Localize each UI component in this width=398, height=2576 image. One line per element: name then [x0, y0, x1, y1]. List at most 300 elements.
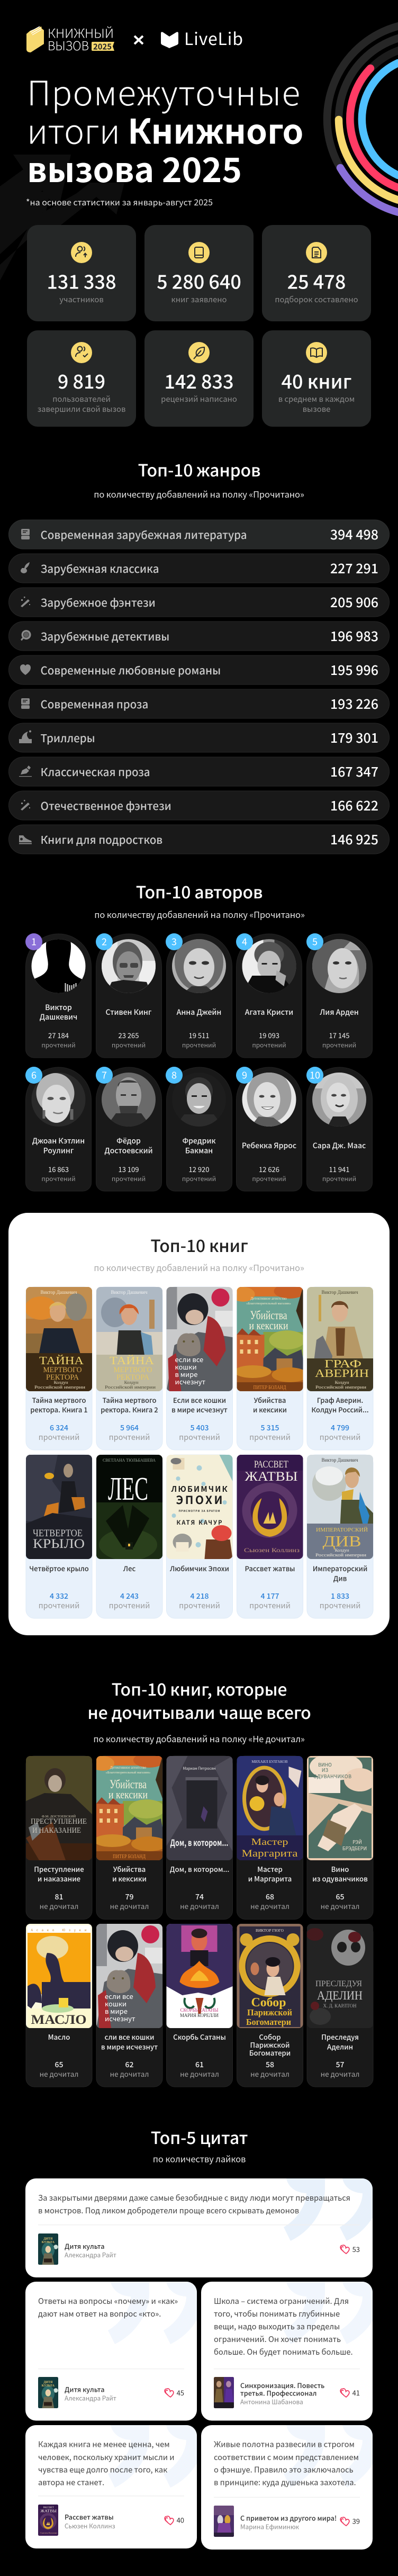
book card 7: Лес — [123, 1563, 135, 1573]
panel: quote 2: Ответы на вопросы «почему» и «как» — [38, 2295, 178, 2307]
cover: Императорский див: ИМПЕРАТОРСКИЙ — [316, 1527, 368, 1533]
cover: Тайна мертвого ректора 1: ТАЙНА — [39, 1354, 84, 1367]
row: genre 1 — [8, 520, 390, 549]
row: genre 1: 394 498 — [330, 525, 378, 544]
photo: Anna Jane — [172, 939, 226, 993]
panel: quote 1 — [25, 2178, 381, 2277]
cover: Граф Аверин: Российской империи — [315, 1384, 367, 1390]
author card 1: 27 184 — [48, 1030, 69, 1040]
cover: Четвёртое крыло — [26, 1455, 92, 1559]
book card 7 — [96, 1455, 162, 1618]
author card 3: 19 511 — [188, 1030, 210, 1040]
cover: Тайна мертвого ректора 2: Российской империи — [105, 1384, 156, 1390]
row: genre 5: 195 996 — [330, 660, 378, 679]
row: genre 10: Книги для подростков — [40, 831, 162, 847]
icon: users up — [71, 242, 92, 263]
row: genre 9 — [8, 791, 390, 820]
row: genre 9: 166 622 — [330, 796, 378, 815]
row: genre 3: Зарубежное фэнтези — [40, 594, 156, 610]
rank badge 8: 8 — [171, 1068, 177, 1082]
book card 2 — [96, 1287, 162, 1450]
panel: quote 2 — [25, 2282, 205, 2420]
cover: Четвёртое крыло: ЧЕТВЕРТОЕ — [33, 1528, 83, 1539]
row: genre 9: Отечественное фэнтези — [40, 797, 171, 813]
heading: top genres: Топ-10 жанров — [138, 457, 260, 482]
subheading: books: по количеству добавлений на полку «Прочитано» — [94, 1261, 304, 1274]
book card 6: прочтений — [39, 1600, 79, 1611]
cover: Любимчик эпохи: ЭПОХИ — [176, 1492, 222, 1508]
rank badge 6 — [25, 1067, 42, 1084]
row: genre 8: 167 347 — [330, 762, 378, 781]
circular progress rings — [327, 23, 398, 215]
book card 4: прочтений — [249, 1431, 291, 1443]
row: genre 6: Современная проза — [40, 696, 148, 711]
rank badge 10: 10 — [310, 1068, 320, 1082]
dnf card 6: Масло — [48, 2032, 70, 2042]
panel: quote 1: За закрытыми дверями даже самые безобидные с виду люди могут превращаться — [38, 2192, 350, 2203]
row: genre 4: 196 983 — [330, 626, 378, 645]
book card 9 — [237, 1455, 303, 1618]
row: genre 5 — [8, 655, 390, 684]
cover thumb: Дитя культа — [38, 2233, 58, 2265]
cover: Скорбь Сатаны — [166, 1924, 233, 2028]
cover thumb: Дитя культа — [38, 2377, 58, 2408]
dnf card 7: в мире исчезнут — [101, 2041, 158, 2052]
author card 2: Стивен Кинг — [106, 1007, 152, 1017]
photo: Agatha Christie — [242, 939, 296, 993]
book card 4: 5 315 — [260, 1422, 279, 1433]
dnf card 6: не дочитал — [40, 2068, 78, 2079]
book card 1: ректора. Книга 1 — [30, 1404, 88, 1415]
panel: quote 5: С приветом из другого мира! — [240, 2512, 337, 2523]
row: genre 7: Триллеры — [40, 729, 95, 745]
dnf card 3: не дочитал — [180, 1901, 219, 1911]
cover: Собор Парижской Богоматери — [237, 1924, 303, 2028]
row: genre 4 — [8, 622, 390, 651]
logo: Книжный вызов 2025: 2025 — [93, 40, 112, 52]
cover: Тайна мертвого ректора 2: РЕКТОРА — [116, 1373, 149, 1382]
dnf card 3 — [166, 1756, 233, 1920]
panel: quote 5: Марина Ефиминюк — [240, 2522, 300, 2532]
icon: hearts — [340, 2389, 349, 2397]
rank badge 5 — [306, 933, 323, 950]
footnote: *на основе статистики за январь-август 2025 — [26, 195, 213, 208]
author card 2: 23 265 — [119, 1030, 139, 1040]
icon: times sign — [134, 36, 143, 44]
panel: quote 4: 40 — [177, 2515, 184, 2525]
decor: quote marks — [284, 2425, 381, 2488]
cover: Если все кошки — [96, 1924, 162, 2028]
book card 1: Тайна мертвого — [32, 1395, 86, 1405]
book card 5: прочтений — [320, 1431, 360, 1443]
author card 10: прочтений — [322, 1174, 356, 1183]
title: итоги Книжного — [27, 105, 303, 154]
book card 2: Тайна мертвого — [103, 1395, 157, 1405]
dnf card 2: и кексики — [112, 1874, 147, 1884]
photo: Rowling — [32, 1073, 86, 1127]
logo: Книжный вызов 2025: ВЫЗОВ — [48, 36, 89, 54]
row: genre 10 — [8, 825, 390, 854]
dnf card 4: и Маргарита — [248, 1874, 292, 1884]
rank badge 4 — [236, 933, 253, 950]
author card 8: Бакман — [185, 1146, 213, 1156]
heading: top authors: Топ-10 авторов — [136, 879, 263, 904]
rank badge 10 — [306, 1067, 323, 1084]
book card 2: 5 964 — [120, 1422, 139, 1433]
panel: quote 4: Сьюзен Коллинз — [65, 2521, 115, 2530]
author card 9: прочтений — [252, 1174, 286, 1183]
author card 6 — [25, 1067, 91, 1191]
dnf card 2 — [91, 1753, 167, 1920]
book card 4: Убийства — [254, 1395, 286, 1405]
panel: stat participants: 131 338 — [47, 267, 116, 294]
book card 2: прочтений — [109, 1431, 150, 1443]
book card 8 — [166, 1455, 233, 1618]
panel: stat books: книг заявлено — [171, 294, 227, 305]
panel: quote 2: 45 — [177, 2388, 184, 2398]
panel: quote 1: Александра Райт — [65, 2250, 116, 2259]
panel: quote 3: Школа – система ограничений. Для — [214, 2295, 349, 2307]
cover: Граф Аверин: АВЕРИН — [315, 1367, 369, 1380]
cover: Собор Парижской Богоматери: Собор — [251, 1996, 286, 2010]
dnf card 10 — [306, 1924, 373, 2087]
panel: quote 1: в монстров. Под ликом добродетели проще всего скрывать демонов — [38, 2205, 299, 2216]
rank badge 2: 2 — [102, 935, 107, 949]
cover: Преследуя Аделин: Х. Д. КАРЛТОН — [323, 2003, 357, 2008]
panel: quote 4: автора не станет. — [38, 2476, 104, 2488]
title — [27, 67, 303, 192]
author card 7: Достоевский — [104, 1146, 153, 1156]
cover: Масло: МАСЛО — [31, 2013, 87, 2027]
panel: genre list — [8, 520, 390, 854]
dnf card 3: Дом, в котором... — [170, 1864, 229, 1874]
cover: Скорбь Сатаны: МАРИЯ КОРЕЛЛИ — [180, 2013, 219, 2018]
cover: Граф Аверин — [307, 1287, 373, 1391]
cover: Убийства и кексики — [237, 1287, 303, 1391]
author card 1: прочтений — [41, 1041, 76, 1049]
book card 9: 4 177 — [260, 1591, 279, 1601]
rank badge 9: 9 — [242, 1068, 247, 1082]
heading: top books: Топ-10 книг — [150, 1233, 248, 1257]
book card 3: Если все кошки — [173, 1395, 226, 1405]
cover: Дом, в котором: Дом, в котором... — [170, 1835, 229, 1849]
dnf card 7: сли все кошки — [105, 2032, 154, 2042]
subheading: unfinished: по количеству добавлений на полку «Не дочитал» — [93, 1732, 305, 1745]
row: genre 3: 205 906 — [330, 592, 378, 611]
row: genre 7: 179 301 — [330, 728, 378, 747]
cover: Четвёртое крыло: КРЫЛО — [33, 1537, 85, 1551]
dnf card 9: 58 — [266, 2059, 274, 2070]
cover: Тайна мертвого ректора 1: МЕРТВОГО — [43, 1366, 82, 1374]
dnf card 5: 65 — [336, 1892, 344, 1902]
dnf card 10: не дочитал — [321, 2068, 359, 2079]
decor: quote marks — [108, 2282, 205, 2344]
cover: Если все кошки — [166, 1287, 233, 1391]
dnf card 7: 62 — [125, 2059, 133, 2070]
book card 2: ректора. Книга 2 — [101, 1404, 158, 1415]
cover: Собор Парижской Богоматери: Богоматери — [246, 2017, 291, 2027]
book card 8: прочтений — [179, 1600, 220, 1611]
author card 3: Анна Джейн — [177, 1007, 221, 1017]
row: genre 1: Современная зарубежная литература — [40, 526, 247, 542]
cover: Скорбь Сатаны: СКОРБЬ САТАНЫ — [180, 2007, 219, 2013]
author card 7: Фёдор — [116, 1136, 141, 1146]
cover: Вино из одуванчиков — [307, 1753, 376, 1860]
cover: Преступление и наказание — [26, 1756, 92, 1860]
cover: Любимчик эпохи: КАТЯ КАЧУР — [177, 1518, 222, 1527]
panel: quote 2: Александра Райт — [65, 2394, 116, 2402]
dnf card 8: Скорбь Сатаны — [173, 2032, 226, 2042]
author card 8 — [166, 1067, 232, 1191]
cover: Тайна мертвого ректора 2: МЕРТВОГО — [113, 1366, 152, 1374]
book card 5: 4 799 — [331, 1422, 349, 1433]
subheading: quotes: по количеству лайков — [153, 2152, 246, 2165]
photo: Dostoevsky — [102, 1073, 156, 1127]
author card 1: Виктор — [45, 1002, 72, 1013]
panel: quote 3: вещи, надо выходить за пределы — [214, 2321, 340, 2332]
cover: Преследуя Аделин: ПРЕСЛЕДУЯ — [315, 1979, 362, 1988]
panel: stat average: вызове — [303, 403, 330, 415]
author card 8: прочтений — [182, 1174, 216, 1183]
dnf card 7: не дочитал — [110, 2068, 149, 2079]
panel: quote 1: 53 — [352, 2244, 360, 2254]
icon: document — [306, 242, 327, 263]
rank badge 8 — [166, 1067, 183, 1084]
rank badge 1: 1 — [31, 935, 37, 949]
cover: Масло: Асако Юзуки — [31, 1928, 87, 1932]
book card 7: 4 243 — [120, 1591, 139, 1601]
dnf card 2: Убийства — [113, 1864, 146, 1874]
row: genre 6: 193 226 — [330, 694, 378, 713]
cover: Мастер и Маргарита: Мастер — [251, 1836, 288, 1847]
photo: Backman — [181, 1077, 217, 1127]
panel: quote 3: третья. Профессионал — [240, 2388, 316, 2398]
decor: quote marks — [284, 2282, 381, 2344]
panel: quote 5: в принципе: куда душенька захотела. — [214, 2476, 356, 2488]
book card 10: Императорский — [313, 1563, 367, 1573]
cover: Вино из одуванчиков: ОДУВАНЧИКОВ — [313, 1773, 351, 1780]
dnf card 1 — [26, 1756, 92, 1920]
panel: quote 5: 39 — [352, 2516, 360, 2526]
row: genre 6 — [8, 689, 390, 718]
panel: quote 2: Дитя культа — [65, 2384, 105, 2394]
author card 6: Роулинг — [43, 1146, 74, 1156]
book card 8: 4 218 — [190, 1591, 209, 1601]
book card 4 — [237, 1286, 303, 1451]
panel: stat reviews: 142 833 — [164, 367, 234, 394]
panel: stat finishers: пользователей — [52, 393, 111, 404]
book card 3: 5 403 — [190, 1422, 209, 1433]
icon: hearts — [340, 2245, 349, 2254]
cover: Лес — [96, 1455, 162, 1561]
dnf card 8: не дочитал — [180, 2068, 219, 2079]
book card 10: прочтений — [320, 1600, 360, 1611]
panel: quote 1: Дитя культа — [65, 2241, 105, 2251]
book card 5: Колдун Россий... — [311, 1404, 369, 1415]
author card 7: прочтений — [112, 1174, 146, 1183]
cover: Граф Аверин: Виктор Дашкевич — [322, 1290, 358, 1295]
decor: quote marks — [284, 2178, 381, 2241]
panel: quote 3: 41 — [352, 2388, 360, 2398]
row: genre 8: Классическая проза — [40, 763, 150, 779]
rank badge 6: 6 — [31, 1068, 37, 1082]
cover: Тайна мертвого ректора 2: Колдун — [124, 1380, 139, 1385]
icon: feather — [188, 342, 210, 363]
panel: stat reviews — [144, 330, 254, 427]
rank badge 4: 4 — [242, 935, 247, 949]
author card 8: Фредрик — [182, 1136, 216, 1146]
author card 9: 12 626 — [259, 1164, 279, 1174]
author card 9 — [236, 1067, 302, 1191]
icon: open book — [306, 342, 327, 363]
logo: Книжный вызов 2025 — [26, 23, 114, 54]
panel: quote 4 — [25, 2425, 205, 2548]
panel: quote 3: Антонина Шабанова — [240, 2397, 303, 2407]
dnf card 1: не дочитал — [40, 1901, 78, 1911]
book card 7: прочтений — [109, 1600, 150, 1611]
cover: Преступление и наказание: ПРЕСТУПЛЕНИЕ — [31, 1817, 87, 1826]
author card 5: 17 145 — [329, 1030, 349, 1040]
dnf card 6: 65 — [55, 2059, 63, 2070]
cover: Преследуя Аделин: АДЕЛИН — [317, 1989, 363, 2002]
panel: quote 5: соответствии с моим представлением — [214, 2452, 359, 2463]
rank badge 3 — [166, 933, 183, 950]
book card 3 — [166, 1287, 233, 1450]
panel: stat finishers — [27, 330, 136, 427]
author card 9: Ребекка Яррос — [242, 1140, 296, 1151]
rank badge 9 — [236, 1067, 253, 1084]
rank badge 1 — [25, 933, 42, 950]
row: genre 8 — [8, 757, 390, 786]
cover: Тайна мертвого ректора 1: Колдун — [54, 1380, 68, 1385]
cover: Императорский див: Российской империи — [315, 1552, 367, 1557]
panel: quote 3: Синхронизация. Повесть — [240, 2380, 324, 2390]
cover thumb: С приветом из другого мира — [214, 2506, 234, 2537]
book card 3: в мире исчезнут — [171, 1404, 228, 1415]
book card 5: Граф Аверин. — [317, 1395, 363, 1405]
author card 7 — [96, 1067, 162, 1191]
dnf card 1: 81 — [55, 1892, 63, 1902]
dnf card 9: Собор — [259, 2032, 281, 2042]
icon: hearts — [165, 2516, 174, 2525]
dnf card 5: Вино — [331, 1864, 349, 1874]
book card 1 — [25, 1287, 92, 1450]
dnf card 2: не дочитал — [110, 1901, 149, 1911]
author card 6: 16 863 — [48, 1164, 69, 1174]
panel: quote 3: ограничений. Он хочет понимать — [214, 2334, 341, 2345]
cover: Мастер и Маргарита: Маргарита — [241, 1848, 298, 1859]
book card 6: 4 332 — [50, 1591, 68, 1601]
author card 4: прочтений — [252, 1041, 286, 1049]
author card 10: 11 941 — [329, 1164, 349, 1174]
dnf card 9: не дочитал — [250, 2068, 290, 2079]
panel: quote 4: человек, поскольку хранит мысли и — [38, 2452, 175, 2463]
cover: Рассвет жатвы — [237, 1455, 303, 1559]
icon: book — [188, 242, 210, 263]
dnf card 4: 68 — [266, 1892, 274, 1902]
dnf card 2: 79 — [125, 1892, 133, 1902]
row: genre 2 — [8, 554, 390, 583]
cover: Вино из одуванчиков: ВИНО — [318, 1761, 332, 1768]
dnf card 10: Аделин — [327, 2041, 353, 2052]
panel: stat average: 40 книг — [282, 367, 351, 394]
panel: quote 3 — [201, 2282, 381, 2420]
cover: Любимчик эпохи: ЛЮБИМЧИК — [170, 1483, 228, 1494]
cover: Убийства и кексики — [91, 1753, 167, 1860]
photo: Stephen King — [102, 939, 156, 993]
panel: stat finishers: завершили свой вызов — [38, 403, 125, 415]
cover: Императорский див — [307, 1455, 373, 1559]
row: genre 7 — [8, 723, 390, 752]
book card 6: Четвёртое крыло — [29, 1563, 89, 1573]
dnf card 6 — [26, 1924, 92, 2087]
panel: stat reviews: рецензий написано — [161, 393, 237, 404]
panel: stat books: 5 280 640 — [157, 267, 241, 294]
row: genre 4: Зарубежные детективы — [40, 628, 169, 644]
cover: Дом, в котором: Мариам Петросян — [183, 1766, 215, 1771]
book card 1: прочтений — [39, 1431, 79, 1443]
book card 4: и кексики — [253, 1404, 287, 1415]
cover: Тайна мертвого ректора 1: РЕКТОРА — [46, 1373, 79, 1382]
cover: Вино из одуванчиков: БРЭДБЕРИ — [342, 1845, 367, 1852]
dnf card 9 — [237, 1924, 303, 2087]
panel: quote 3: больше. Он будет понимать больше. — [214, 2346, 353, 2357]
dnf card 10: Преследуя — [321, 2032, 359, 2042]
dnf card 4: не дочитал — [250, 1901, 290, 1911]
panel: quote 4: Рассвет жатвы — [65, 2511, 114, 2522]
author card 6: Джоан Кэтлин — [32, 1136, 85, 1146]
book card 10: Див — [333, 1573, 347, 1583]
row: genre 3 — [8, 588, 390, 617]
dnf card 8 — [166, 1924, 233, 2087]
dnf card 3: 74 — [195, 1892, 204, 1902]
panel: stat participants: участников — [59, 294, 104, 305]
panel: quote 5: Живые полотна развесили в строгом — [214, 2438, 355, 2450]
cover: Собор Парижской Богоматери: ВИКТОР ГЮГО — [256, 1928, 284, 1933]
dnf card 8: 61 — [195, 2059, 204, 2070]
decorative faint arrows — [0, 155, 124, 281]
dnf card 1: и наказание — [38, 1874, 80, 1884]
dnf card 4: Мастер — [257, 1864, 283, 1874]
rank badge 3: 3 — [171, 935, 177, 949]
author card 5: Лия Арден — [319, 1007, 359, 1017]
author card 4: 19 093 — [259, 1030, 279, 1040]
photo: Maas — [312, 1073, 366, 1127]
cover: Преступление и наказание: Ф.М. ДОСТОЕВСКИЙ — [42, 1814, 76, 1818]
dnf card 9: Парижской — [250, 2040, 290, 2050]
panel: top books (white) — [8, 1213, 390, 1635]
author card 2 — [96, 933, 162, 1058]
cover thumb: Синхронизация — [214, 2377, 234, 2408]
heading: unfinished books: не дочитывали чаще всего — [87, 1700, 311, 1724]
author card 2: прочтений — [112, 1041, 146, 1049]
dnf card 10: 57 — [336, 2059, 344, 2070]
logo: LiveLib: LiveLib — [184, 26, 243, 50]
panel: quote 4: Каждая книга не менее ценна, чем — [38, 2438, 170, 2450]
row: genre 5: Современные любовные романы — [40, 662, 221, 678]
panel: stat average — [262, 330, 371, 427]
book card 9: Рассвет жатвы — [245, 1563, 295, 1573]
author card 4: Агата Кристи — [245, 1007, 293, 1017]
photo: Yarros — [242, 1070, 296, 1127]
cover: Лес: СВЕТЛАНА ТЮЛЬБАШЕВА — [103, 1458, 156, 1463]
cover: Императорский див: Колдун — [335, 1547, 349, 1553]
book card 6 — [26, 1455, 92, 1618]
photo: Lia Arden — [312, 939, 366, 993]
author card 5: прочтений — [322, 1041, 356, 1049]
rank badge 5: 5 — [312, 935, 318, 949]
dnf card 4 — [237, 1756, 303, 1920]
